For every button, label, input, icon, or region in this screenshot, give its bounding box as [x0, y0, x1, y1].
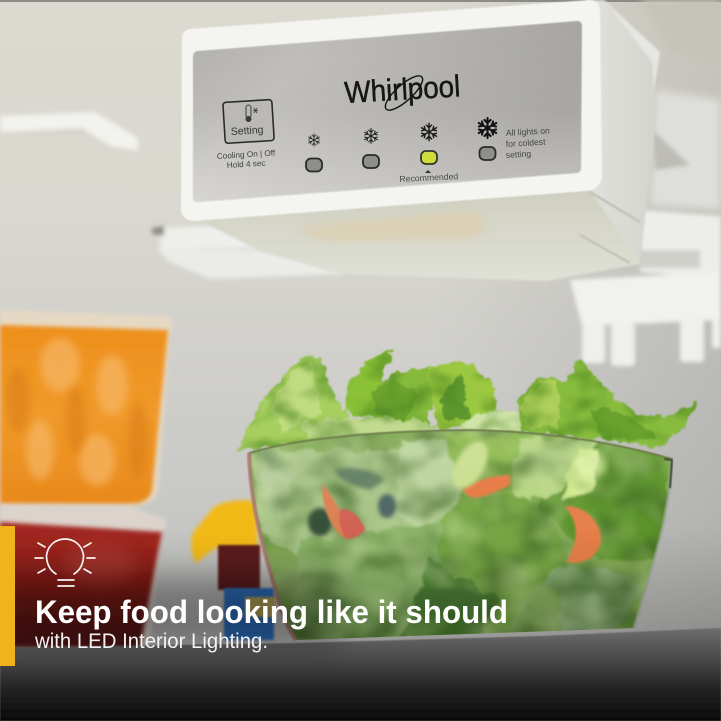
housing underside [195, 190, 640, 281]
bright highlights [574, 451, 606, 479]
indicator light 3: lit [421, 151, 437, 164]
lettuce above the rim [238, 350, 695, 452]
housing right side [586, 0, 655, 262]
coldest setting note [506, 125, 550, 160]
yellow accent bar [0, 526, 15, 666]
salad bowl [238, 350, 695, 640]
coldest setting note: for coldest [506, 137, 546, 149]
brushed steel panel [193, 21, 582, 202]
Whirlpool logo: Whirlpool [343, 69, 461, 110]
setting caption: Hold 4 sec [227, 159, 266, 170]
indicator light 2 [363, 155, 379, 168]
subheading: with LED Interior Lighting. [34, 630, 268, 653]
setting button [223, 100, 274, 143]
shelf [0, 628, 721, 721]
blurred door bin, right side [570, 130, 721, 366]
recommended label: Recommended [399, 171, 459, 184]
setting caption: Cooling On | Off [217, 148, 276, 161]
indicator light 4 [480, 147, 496, 160]
icon: thermometer and snowflake [246, 105, 258, 122]
dark gaps between leaves [308, 468, 484, 612]
lettuce inside the bowl [245, 428, 675, 640]
control housing [181, 0, 660, 281]
blurred shelf bracket, middle [152, 225, 342, 279]
coldest setting note: All lights on [506, 125, 550, 138]
carrot slices [323, 475, 601, 563]
yellow-lidded jar [191, 500, 275, 640]
glass rim and walls [249, 430, 672, 459]
heading: Keep food looking like it should [35, 594, 508, 630]
white bezel [181, 0, 602, 221]
red container [0, 505, 166, 648]
icon: snowflake level 2 [365, 129, 377, 143]
blurred shelf bracket, upper left [0, 112, 138, 152]
leaf texture [245, 428, 675, 640]
bottom dark gradient [0, 530, 721, 721]
setting button: Setting [230, 124, 264, 138]
icon: snowflake level 1 [309, 134, 319, 146]
coldest setting note: setting [506, 148, 532, 160]
icon: snowflake level 4 [479, 118, 496, 138]
orange container [0, 310, 173, 506]
indicator light 1 [306, 158, 322, 172]
setting caption [217, 148, 276, 170]
icon: snowflake level 3 [422, 123, 436, 141]
icon: light bulb [35, 539, 95, 586]
